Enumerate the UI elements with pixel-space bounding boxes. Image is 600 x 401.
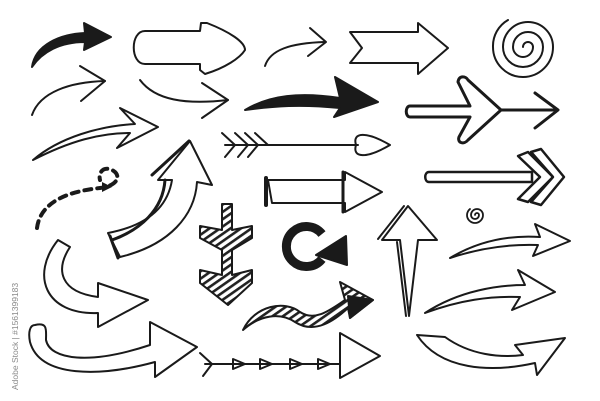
arrow: pill outline [134, 23, 245, 74]
arrow: 3D rectangle [266, 172, 382, 212]
arrow: black curved [32, 23, 111, 67]
arrow: 3D curved up [108, 141, 212, 258]
arrow: double chevron [425, 149, 564, 205]
arrow: thin curved row 2 [32, 66, 105, 115]
arrow: thin swoop row 2 middle [140, 80, 228, 118]
arrow: striped wavy [243, 282, 373, 330]
arrow: ribbon [350, 23, 448, 74]
arrow: tall up [378, 206, 437, 316]
arrow: dashed loop [37, 169, 117, 228]
arrow: thin outline right 1 [450, 224, 570, 258]
watermark text: Adobe Stock | #1561399183 [10, 283, 20, 390]
arrow: thin top middle [265, 28, 326, 66]
arrow: thin outline right 2 [425, 270, 555, 313]
arrow: outlined feather arrow [406, 77, 558, 143]
icon: spiral [493, 20, 553, 77]
arrow: big black curved [245, 77, 378, 117]
icon: small spiral [467, 209, 483, 223]
icon: refresh circle [286, 226, 347, 266]
arrow: line with triangles [200, 333, 380, 378]
arrow: striped down [200, 204, 252, 305]
arrow: outline sweep [33, 108, 158, 160]
arrow: fletched with heart head [222, 133, 390, 157]
arrow: bottom left long [29, 322, 197, 377]
arrow: U curve bottom right [417, 335, 565, 375]
arrow: left hook [44, 240, 148, 327]
